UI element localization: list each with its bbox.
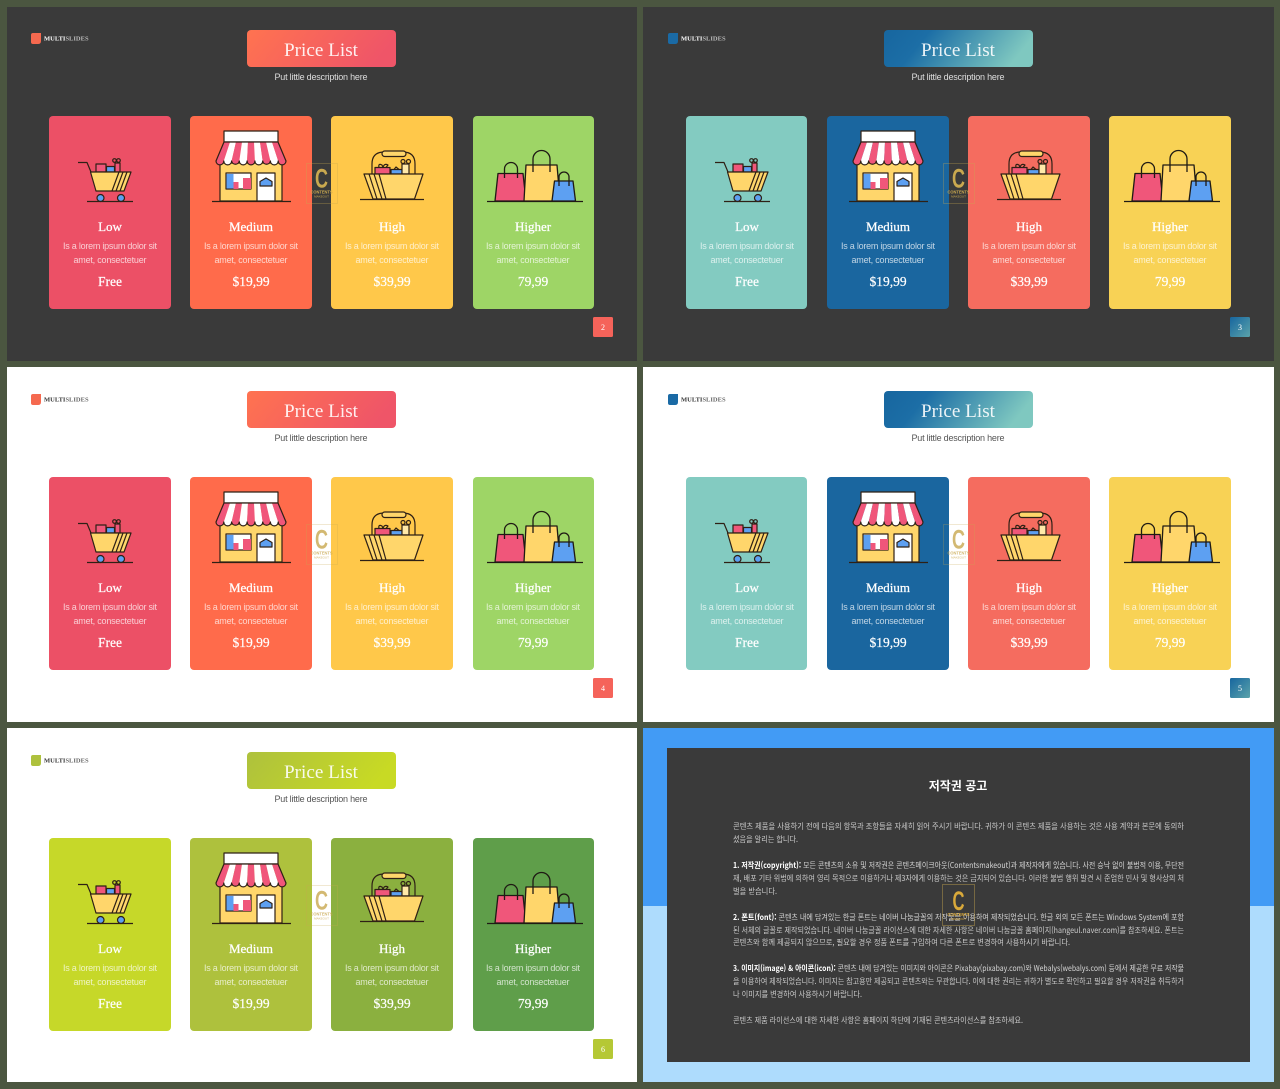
- card: High: $39,99: [373, 635, 411, 650]
- watermark: C: [952, 524, 965, 554]
- watermark: CONTENTS: [310, 912, 332, 916]
- card: Higher: [473, 838, 594, 1031]
- card: Higher: [1109, 477, 1231, 670]
- card: Low: [49, 477, 171, 670]
- card: Higher: 79,99: [518, 635, 548, 650]
- subtitle: Put little description here: [274, 72, 368, 82]
- watermark: MAKEOUT: [951, 194, 966, 198]
- watermark: MAKEOUT: [951, 917, 966, 921]
- card: Higher: Is a lorem ipsum dolor sit: [1123, 602, 1217, 612]
- card: Higher: Higher: [515, 941, 552, 956]
- card: Low: amet, consectetuer: [710, 255, 784, 265]
- card: High: $39,99: [373, 274, 411, 289]
- watermark: [944, 164, 974, 204]
- logo: [668, 394, 726, 405]
- card: Medium: $19,99: [232, 996, 270, 1011]
- watermark: MAKEOUT: [314, 556, 329, 560]
- card: High: Is a lorem ipsum dolor sit: [345, 963, 439, 973]
- section 1: copyright: 재, 배포 기타 위법에 의하여 영리 목적으로 이용하거나 제3자에게 이용하는 것은 금지되어 있습니다. 이러한 불법 행위 발견 시 준엄한 민사 및 형사상의 처: [733, 873, 1184, 884]
- card: Low: Is a lorem ipsum dolor sit: [700, 602, 794, 612]
- icon: basket: [997, 151, 1061, 200]
- card: High: Is a lorem ipsum dolor sit: [345, 241, 439, 251]
- icon: shopping bags: [1124, 512, 1220, 562]
- watermark: [944, 524, 974, 564]
- watermark: C: [315, 524, 328, 554]
- icon: shopping bags: [487, 151, 583, 202]
- card: Low: Low: [98, 580, 123, 595]
- card: High: [968, 116, 1090, 309]
- card: High: Is a lorem ipsum dolor sit: [982, 241, 1076, 251]
- card: Medium: $19,99: [232, 635, 270, 650]
- title pill: [247, 391, 396, 428]
- card: Medium: Is a lorem ipsum dolor sit: [204, 963, 298, 973]
- watermark: MAKEOUT: [314, 194, 329, 198]
- icon: basket: [360, 512, 424, 560]
- watermark: C: [952, 886, 964, 916]
- card: High: amet, consectetuer: [992, 255, 1066, 265]
- card: High: Is a lorem ipsum dolor sit: [982, 602, 1076, 612]
- subtitle: Put little description here: [274, 433, 368, 443]
- icon: store: [849, 131, 928, 202]
- card: High: High: [1016, 580, 1042, 595]
- card: Low: Is a lorem ipsum dolor sit: [63, 241, 157, 251]
- logo: [31, 394, 89, 405]
- title pill: [884, 391, 1033, 428]
- section 2: font: [733, 912, 1185, 948]
- icon: shopping bags: [487, 512, 583, 562]
- section 2: font: 된 서체의 글꼴로 제작되었습니다. 네이버 나눔글꼴 라이선스에 대한 자세한 사항은 네이버 나눔글꼴 홈페이지(hangeul.naver.com)를 참조하세요. 폰트는: [733, 925, 1184, 936]
- card: Higher: Is a lorem ipsum dolor sit: [486, 963, 580, 973]
- card: Low: Free: [735, 635, 759, 650]
- title pill: [884, 30, 1033, 67]
- watermark: CONTENTS: [948, 190, 970, 194]
- card: Medium: Is a lorem ipsum dolor sit: [841, 241, 935, 251]
- title pill: [247, 752, 396, 789]
- title pill: Price List: [921, 402, 996, 422]
- card: Higher: amet, consectetuer: [496, 616, 570, 626]
- card: Higher: amet, consectetuer: [1134, 616, 1206, 626]
- card: Medium: amet, consectetuer: [214, 977, 288, 987]
- card: High: High: [379, 219, 406, 234]
- watermark: CONTENTS: [310, 190, 332, 194]
- logo: MULTISLIDES: [681, 36, 726, 42]
- card: High: [331, 477, 453, 670]
- card: Higher: Higher: [515, 219, 552, 234]
- card: Higher: amet, consectetuer: [496, 255, 570, 265]
- card: Low: amet, consectetuer: [74, 977, 146, 987]
- watermark: C: [952, 164, 965, 194]
- card: Higher: [1109, 116, 1231, 309]
- card: Medium: Medium: [229, 580, 273, 595]
- title pill: Price List: [284, 763, 359, 783]
- card: Low: Low: [98, 219, 123, 234]
- watermark: C: [315, 164, 328, 194]
- page number: 4: [601, 684, 605, 693]
- card: Higher: Higher: [1152, 219, 1189, 234]
- card: High: amet, consectetuer: [356, 616, 428, 626]
- page number: 3: [1238, 323, 1242, 332]
- card: Medium: [190, 116, 312, 309]
- card: Medium: $19,99: [869, 274, 907, 289]
- card: Medium: amet, consectetuer: [852, 255, 924, 265]
- card: Medium: Medium: [229, 219, 273, 234]
- logo: MULTISLIDES: [44, 36, 89, 42]
- card: Higher: 79,99: [518, 274, 548, 289]
- icon: shopping bags: [1124, 151, 1220, 202]
- watermark: CONTENTS: [948, 550, 970, 556]
- card: Medium: [190, 838, 312, 1031]
- card: Higher: Higher: [515, 580, 552, 595]
- icon: basket: [360, 873, 424, 922]
- card: Medium: Is a lorem ipsum dolor sit: [204, 602, 298, 612]
- card: Higher: Is a lorem ipsum dolor sit: [486, 241, 580, 251]
- card: Low: [49, 838, 171, 1031]
- icon: shopping cart: [715, 159, 770, 202]
- icon: store: [849, 492, 928, 562]
- card: High: High: [379, 941, 406, 956]
- card: Low: Is a lorem ipsum dolor sit: [63, 963, 157, 973]
- card: Low: Free: [735, 274, 759, 289]
- card: Medium: Is a lorem ipsum dolor sit: [204, 241, 298, 251]
- page number: [1230, 317, 1250, 337]
- section 3: image and icon: [733, 963, 1184, 1000]
- section 1: copyright: [733, 860, 1184, 897]
- card: Low: amet, consectetuer: [710, 616, 784, 626]
- card: Low: amet, consectetuer: [74, 255, 146, 265]
- card: Higher: Higher: [1152, 580, 1189, 595]
- card: Higher: Is a lorem ipsum dolor sit: [486, 602, 580, 612]
- icon: basket: [360, 151, 424, 200]
- watermark: MAKEOUT: [951, 556, 966, 560]
- page number: 2: [601, 323, 605, 332]
- section 3: image and icon: 나 이미지를 변경하여 사용하시기 바랍니다.: [733, 989, 862, 1000]
- page number: [1230, 678, 1250, 698]
- panel: slide 4 light warm price list: [7, 367, 637, 722]
- section 2: font: 2. 폰트(font): 콘텐츠 내에 담겨있는 한글 폰트는 네이버 나눔글꼴의 저작물을 이용하여 제작되었습니다. 한글 외의 모든 폰트는 Windows System에 포함: [733, 912, 1185, 923]
- card: Low: [686, 116, 807, 309]
- subtitle: Put little description here: [912, 72, 1004, 82]
- icon: store: [212, 492, 291, 562]
- watermark: CONTENTS: [310, 550, 332, 556]
- icon: basket: [997, 512, 1061, 560]
- panel: slide 2 dark warm price list: [7, 7, 637, 361]
- card: Medium: amet, consectetuer: [852, 616, 924, 626]
- card: High: [331, 838, 453, 1031]
- card: High: Is a lorem ipsum dolor sit: [345, 602, 439, 612]
- panel: slide 3 dark blue price list: [643, 7, 1274, 361]
- panel: slide 6 light green price list: [7, 728, 637, 1082]
- title pill: [247, 30, 396, 67]
- icon: store: [212, 853, 291, 924]
- intro paragraph: [733, 821, 1185, 845]
- card: Low: Free: [98, 996, 122, 1011]
- logo: [31, 755, 89, 766]
- section 3: image and icon: 3. 이미지(image) & 아이콘(icon): 콘텐츠 내에 담겨있는 이미지와 아이콘은 Pixabay(pixabay.com)와 Webalys(webalys.com) 등에서 제공한 무료 저작물: [733, 963, 1184, 974]
- icon: store: [212, 131, 291, 202]
- page number: [593, 1039, 613, 1059]
- watermark: [306, 164, 338, 204]
- card: High: amet, consectetuer: [992, 616, 1066, 626]
- card: Medium: Is a lorem ipsum dolor sit: [841, 602, 935, 612]
- card: Low: Low: [735, 219, 760, 234]
- title pill: Price List: [921, 41, 996, 61]
- card: High: High: [379, 580, 406, 595]
- section 3: image and icon: 을 이용하여 제작되었습니다. 이미지는 참고용만 제공되고 콘텐츠와는 무관합니다. 이에 대한 권리는 귀하가 별도로 확인하고 필요할 경우 저작권을 취득하거: [733, 976, 1184, 987]
- card: Higher: [473, 116, 594, 309]
- card: Low: amet, consectetuer: [74, 616, 146, 626]
- card: Medium: amet, consectetuer: [214, 616, 288, 626]
- page number: 6: [601, 1045, 605, 1054]
- logo: MULTISLIDES: [681, 396, 726, 404]
- card: High: High: [1016, 219, 1042, 234]
- watermark: [942, 884, 974, 926]
- logo: MULTISLIDES: [44, 758, 89, 764]
- logo: [668, 33, 726, 44]
- card: Medium: [827, 116, 949, 309]
- watermark: MAKEOUT: [314, 916, 329, 920]
- intro paragraph: 콘텐츠 제품을 사용하기 전에 다음의 항목과 조항들을 자세히 읽어 주시기 바랍니다. 귀하가 이 콘텐츠 제품을 사용하는 것은 사용 계약과 본문에 동의하: [733, 821, 1185, 832]
- page number: [593, 317, 613, 337]
- card: Medium: Medium: [229, 941, 273, 956]
- card: High: [968, 477, 1090, 670]
- subtitle: Put little description here: [274, 794, 368, 804]
- watermark: [306, 886, 338, 926]
- watermark: [306, 524, 338, 564]
- card: High: [331, 116, 453, 309]
- card: Medium: [827, 477, 949, 670]
- card: Low: Low: [735, 580, 760, 595]
- card: Medium: amet, consectetuer: [214, 255, 288, 265]
- section 1: copyright: 1. 저작권(copyright): 모든 콘텐츠의 소유 및 저작권은 콘텐츠메이크아웃(Contentsmakeout)과 제작자에게 있습니다. 사전 승낙 없이 불법적 이용, 무단전: [733, 860, 1184, 871]
- card: Low: [686, 477, 807, 670]
- icon: shopping cart: [78, 520, 133, 562]
- watermark: C: [315, 886, 328, 916]
- card: High: $39,99: [1010, 635, 1048, 650]
- icon: shopping cart: [78, 159, 133, 202]
- card: Higher: amet, consectetuer: [1134, 255, 1206, 265]
- card: Low: Free: [98, 274, 122, 289]
- card: Medium: $19,99: [869, 635, 907, 650]
- card: High: amet, consectetuer: [356, 977, 428, 987]
- card: Low: Is a lorem ipsum dolor sit: [700, 241, 794, 251]
- icon: shopping cart: [715, 520, 770, 562]
- section 1: copyright: 벌을 받습니다.: [733, 886, 777, 897]
- card: Low: Free: [98, 635, 122, 650]
- card: High: $39,99: [373, 996, 411, 1011]
- card: Medium: [190, 477, 312, 670]
- icon: shopping bags: [487, 873, 583, 924]
- card: Higher: [473, 477, 594, 670]
- heading: copyright notice: 저작권 공고: [929, 777, 987, 794]
- page number: 5: [1238, 684, 1242, 693]
- card: Higher: amet, consectetuer: [496, 977, 570, 987]
- card: Higher: 79,99: [1155, 274, 1185, 289]
- title pill: Price List: [284, 41, 359, 61]
- logo: MULTISLIDES: [44, 396, 89, 404]
- section 2: font: 콘텐츠와 함께 제공되지 않으므로, 필요할 경우 정품 폰트를 구입하여 다른 폰트로 변경하여 사용하시기 바랍니다.: [733, 937, 1070, 948]
- card: Higher: 79,99: [1155, 635, 1185, 650]
- card: Higher: Is a lorem ipsum dolor sit: [1123, 241, 1217, 251]
- subtitle: Put little description here: [912, 433, 1004, 443]
- title pill: Price List: [284, 402, 359, 422]
- intro paragraph: 셨음을 알리는 합니다.: [733, 834, 798, 845]
- card: Medium: Medium: [866, 219, 910, 234]
- card: Low: Is a lorem ipsum dolor sit: [63, 602, 157, 612]
- logo: [31, 33, 89, 44]
- page number: [593, 678, 613, 698]
- closing line: 콘텐츠 제품 라이선스에 대한 자세한 사항은 홈페이지 하단에 기재된 콘텐츠라이선스를 참조하세요.: [733, 1015, 1023, 1026]
- card: Medium: $19,99: [232, 274, 270, 289]
- card: Low: [49, 116, 171, 309]
- icon: shopping cart: [78, 881, 133, 924]
- card: Medium: Medium: [866, 580, 910, 595]
- watermark: CONTENTS: [948, 912, 970, 917]
- card: High: $39,99: [1010, 274, 1048, 289]
- panel: copyright notice slide: [643, 728, 1274, 1082]
- card: High: amet, consectetuer: [356, 255, 428, 265]
- panel: slide 5 light blue price list: [643, 367, 1274, 722]
- card: Higher: 79,99: [518, 996, 548, 1011]
- card: Low: Low: [98, 941, 123, 956]
